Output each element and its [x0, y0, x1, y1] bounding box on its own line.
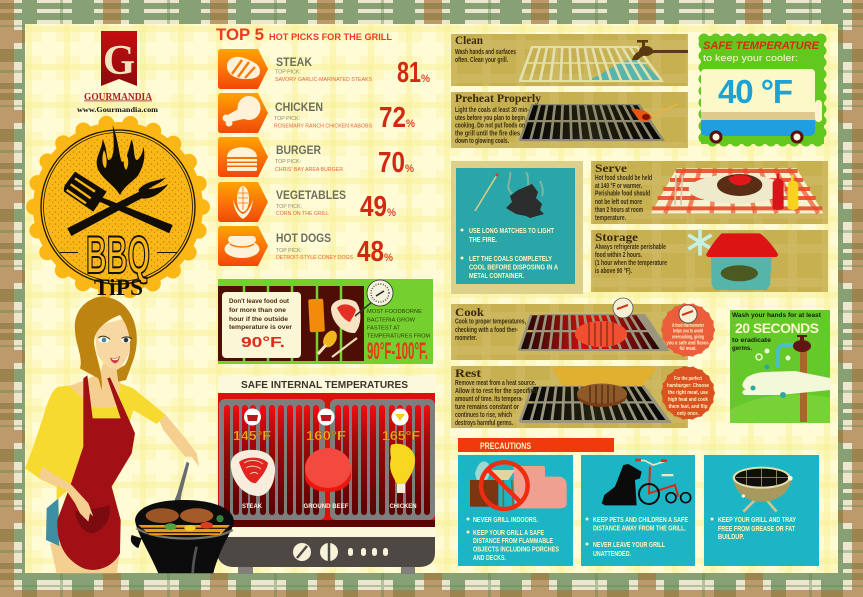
heading: SAFE TEMPERATURE — [703, 40, 820, 52]
body text: often. Clean your grill. — [455, 57, 508, 64]
column: chicken: CHICKEN — [390, 503, 417, 510]
bacteria text — [367, 309, 430, 365]
panel: food left out and bacteria — [218, 279, 433, 365]
tips text: METAL CONTAINER. — [469, 271, 524, 280]
body text: amount of time. Its tempera- — [455, 396, 523, 403]
icon: burger — [227, 147, 257, 171]
BBQ lettering: BBQ — [86, 226, 150, 285]
body text — [595, 244, 667, 275]
body text — [595, 175, 652, 222]
row: steak — [218, 49, 430, 89]
body text: Light the coals at least 30 min- — [455, 107, 529, 114]
body text: (1 hour when the temperature — [595, 260, 667, 267]
icon: tap and washing hand — [742, 335, 830, 422]
panel: preheat properly — [451, 91, 688, 148]
heading text — [732, 312, 822, 352]
heading text: 20 SECONDS — [735, 320, 819, 336]
tips text: THE FIRE. — [469, 235, 497, 244]
brand name: GOURMANDIA — [84, 91, 152, 103]
body text — [455, 107, 529, 145]
note card: hour if the outside — [229, 316, 289, 323]
row: steak: TOP PICK: — [275, 70, 301, 76]
icon: prohibited furniture — [470, 461, 567, 509]
tips — [710, 515, 796, 541]
callout: perfect hamburger: only once. — [677, 411, 699, 417]
callout: food thermometer — [662, 304, 714, 356]
row: steak: STEAK — [276, 57, 313, 69]
panel: rest — [451, 366, 688, 428]
icon: chicken leg — [222, 96, 260, 126]
card: never grill indoors — [458, 455, 573, 566]
tips text: LET THE COALS COMPLETELY — [469, 254, 552, 263]
panel: top 5 hot picks — [216, 25, 430, 268]
body text: is above 90 °F). — [595, 267, 632, 275]
body text: Cook to proper temperatures, — [455, 318, 526, 326]
body text: destroys harmful germs. — [455, 420, 513, 427]
row: burger: 70 — [378, 147, 405, 179]
body text: Remove meat from a heat source. — [455, 380, 536, 387]
body text: at 140 °F or warmer. — [595, 182, 642, 190]
row: hot dogs — [218, 226, 393, 268]
shirt — [25, 383, 166, 500]
column: steak: 145°F — [233, 428, 271, 443]
heading: HOT PICKS FOR THE GRILL — [269, 32, 393, 42]
heading — [216, 25, 393, 44]
callout: food thermometer: ful meat. — [680, 346, 697, 352]
icon: steak — [227, 57, 260, 79]
website url: www.Gourmandia.com — [77, 105, 159, 114]
icon: snowflake and food container — [688, 229, 778, 290]
right arm — [158, 414, 199, 467]
row: burger: % — [405, 163, 414, 175]
illustration: kettle grill — [131, 462, 234, 573]
row: vegetables: VEGETABLES — [276, 190, 346, 202]
icon: plate on checked placemat with bottles — [651, 168, 823, 213]
neck and chest — [69, 363, 121, 408]
body text: temperature. — [595, 215, 626, 222]
body text: food within 2 hours. — [595, 252, 642, 259]
body text: the grill until the fire dies — [455, 130, 520, 138]
card: keep grill clean — [704, 455, 819, 566]
tips text: USE LONG MATCHES TO LIGHT — [469, 226, 554, 235]
tips: AND DECKS. — [473, 553, 506, 562]
column: steak — [231, 408, 275, 510]
icon: hot grate with patty and thermometer — [519, 298, 670, 351]
icon: long match — [475, 174, 498, 211]
body text: Allow it to rest for the specified — [455, 388, 537, 395]
body text: checking with a food ther- — [455, 327, 518, 334]
heading: Serve — [595, 161, 628, 175]
panel: wash your hands — [730, 310, 830, 423]
grill legs — [238, 566, 415, 574]
panel: food left out and bacteria: 90°F-100°F. — [367, 338, 428, 365]
heading: SAFE INTERNAL TEMPERATURES — [241, 380, 408, 391]
note card: for more than one — [229, 307, 287, 314]
badge: BBQ Tips — [33, 122, 203, 300]
callout: food thermometer: A food thermometer — [672, 323, 704, 329]
heading: to keep your cooler: — [703, 53, 798, 63]
icon: shining grill — [733, 467, 793, 512]
callout: perfect hamburger: the right meat, use — [668, 390, 708, 396]
temperature value: 40 °F — [718, 73, 793, 110]
row: burger: TOP PICK: — [275, 159, 301, 165]
head — [95, 318, 131, 369]
row: chicken: 72 — [379, 102, 406, 134]
tips: UNATTENDED. — [593, 549, 631, 558]
tips: NEVER LEAVE YOUR GRILL — [593, 540, 665, 549]
row: steak: 81 — [397, 57, 421, 89]
body text: not be left out more — [595, 199, 642, 206]
row: hot dogs: HOT DOGS — [276, 233, 331, 245]
tips text: COOL BEFORE DISPOSING IN A — [469, 262, 558, 272]
note card: Don't leave food out — [229, 298, 290, 305]
column: ground beef — [304, 408, 351, 510]
legs and arms skin — [50, 543, 120, 573]
tips — [466, 515, 559, 562]
row: hot dogs: % — [384, 252, 393, 264]
callout: food thermometer: you a safe and flavor- — [666, 340, 710, 346]
row: steak: % — [421, 73, 430, 85]
body text: Hot food should be held — [595, 175, 652, 182]
bacteria text: MOST FOODBORNE — [367, 309, 422, 315]
hair — [75, 297, 137, 390]
tips: OBJECTS INCLUDING PORCHES — [473, 544, 559, 554]
panel: clean — [451, 33, 688, 86]
tips text — [460, 226, 558, 280]
note card — [222, 292, 301, 358]
row: vegetables: TOP PICK: — [276, 204, 302, 210]
tips: DISTANCE FROM FLAMMABLE — [473, 536, 553, 545]
body text: Wash hands and surfaces — [455, 49, 516, 56]
row: steak: SAVORY GARLIC-MARINATED STEAKS — [275, 77, 372, 83]
panel: storage — [591, 229, 828, 292]
tips: KEEP PETS AND CHILDREN A SAFE — [593, 515, 688, 524]
icon: coals with smoke — [506, 172, 544, 218]
heading — [218, 376, 435, 392]
tips — [586, 515, 688, 558]
body text: than 2 hours at room — [595, 207, 643, 214]
icon: hot dog — [224, 236, 260, 258]
face details — [98, 336, 132, 363]
callout: perfect hamburger: hamburger: Choose — [667, 383, 709, 389]
callout: food thermometer: overcooking, giving — [672, 334, 704, 340]
icon: cooler — [701, 69, 822, 144]
heading bar: PRECAUTIONS — [480, 441, 531, 451]
grill bars — [224, 405, 430, 515]
heading: Cook — [455, 305, 484, 319]
bacteria text: BACTERIA GROW — [367, 318, 416, 324]
note card: 90°F. — [241, 334, 285, 351]
logo: Gourmandia — [77, 31, 159, 114]
heading: Storage — [595, 230, 639, 244]
heading text: to eradicate — [732, 337, 771, 344]
column: chicken: 165°F — [382, 428, 420, 443]
column: ground beef: 160°F — [306, 428, 346, 443]
body text: mometer. — [455, 335, 477, 342]
callout: perfect hamburger: For the perfect — [674, 376, 702, 382]
card: pets and children — [581, 455, 695, 566]
heading bar — [458, 438, 614, 452]
control panel — [218, 527, 435, 567]
tips: KEEP YOUR GRILL AND TRAY — [718, 515, 796, 524]
body text: continues to rise, which — [455, 412, 512, 419]
row: vegetables: 49 — [360, 191, 387, 223]
body text: Perishable food should — [595, 190, 650, 198]
apron pocket and forearm — [75, 505, 110, 533]
column: chicken — [382, 408, 420, 510]
bacteria text: FASTEST AT — [367, 326, 400, 332]
body text — [455, 49, 516, 64]
apron — [57, 375, 135, 570]
heading: Rest — [455, 366, 481, 380]
row: burger: BURGER — [276, 145, 322, 157]
row: chicken: % — [406, 118, 415, 130]
fork — [173, 462, 189, 507]
heading: TOP 5 — [216, 25, 264, 44]
callout: food thermometer: helps you to avoid — [673, 328, 703, 334]
icon: corn dog, steak, drumstick, knife — [308, 299, 360, 357]
row: hot dogs: TOP PICK: — [276, 248, 302, 254]
heading — [703, 40, 820, 63]
icon: dog and tricycle — [602, 459, 691, 505]
row: hot dogs: 48 — [357, 236, 384, 268]
TiPS lettering: TiPS — [94, 275, 143, 300]
icon: thermometer gauge — [355, 280, 393, 316]
illustration: woman at grill — [25, 297, 199, 573]
panel: safe temperature cooler — [701, 36, 824, 144]
row: burger — [218, 137, 414, 179]
icon: grate with resting patty — [520, 367, 672, 423]
tips: NEVER GRILL INDOORS. — [473, 515, 538, 524]
tips: BUILDUP. — [718, 532, 744, 541]
shorts — [46, 498, 59, 546]
body text: down to glowing coals. — [455, 138, 509, 145]
panel: matches and coals — [451, 161, 583, 294]
tips: KEEP YOUR GRILL A SAFE — [473, 528, 544, 537]
note card: temperature is over — [229, 324, 293, 331]
body text: utes before you plan to begin — [455, 115, 525, 122]
icon: corn — [233, 186, 253, 219]
heading: Preheat Properly — [455, 91, 541, 105]
heading: Clean — [455, 33, 483, 47]
row: chicken: TOP PICK: — [274, 116, 300, 122]
row: hot dogs: DETROIT-STYLE CONEY DOGS — [276, 255, 353, 261]
panel: safe internal temperatures — [218, 376, 435, 574]
body text: cooking. Do not put foods on — [455, 122, 525, 130]
icon: red banner with G: G — [103, 38, 135, 84]
heading text: Wash your hands for at least — [732, 312, 822, 319]
row: chicken: CHICKEN — [275, 102, 323, 114]
bacteria text: TEMPERATURES FROM — [367, 334, 430, 340]
column: ground beef: GROUND BEEF — [304, 503, 349, 510]
row: burger: CHRIS' BAY AREA BURGER — [275, 167, 343, 173]
row: vegetables: CORN ON THE GRILL — [276, 211, 329, 217]
row: vegetables — [218, 182, 396, 223]
body text: ture remains constant or — [455, 404, 519, 411]
tips: FREE FROM GREASE OR FAT — [718, 524, 795, 533]
icon: hot grate with match — [520, 104, 678, 141]
callout: perfect hamburger — [662, 367, 714, 419]
panel: serve — [591, 161, 828, 224]
row: chicken: ROSEMARY RANCH CHICKEN KABOBS — [274, 124, 372, 130]
heading text: germs. — [732, 345, 752, 352]
panel: cook — [451, 298, 688, 360]
icon: flame, spatula and fork — [64, 125, 173, 236]
icon: clean grate with running tap — [520, 40, 688, 81]
tips: DISTANCE AWAY FROM THE GRILL. — [593, 524, 686, 532]
body text: Always refrigerate perishable — [595, 244, 666, 251]
callout: perfect hamburger: them fast, and flip — [668, 404, 708, 410]
callout: perfect hamburger: high heat and cook — [668, 397, 709, 403]
row: vegetables: % — [387, 207, 396, 219]
panel: precautions — [458, 438, 819, 566]
body text — [455, 318, 526, 342]
body text — [455, 380, 537, 427]
column: steak: STEAK — [242, 503, 262, 510]
row: chicken — [218, 93, 415, 134]
